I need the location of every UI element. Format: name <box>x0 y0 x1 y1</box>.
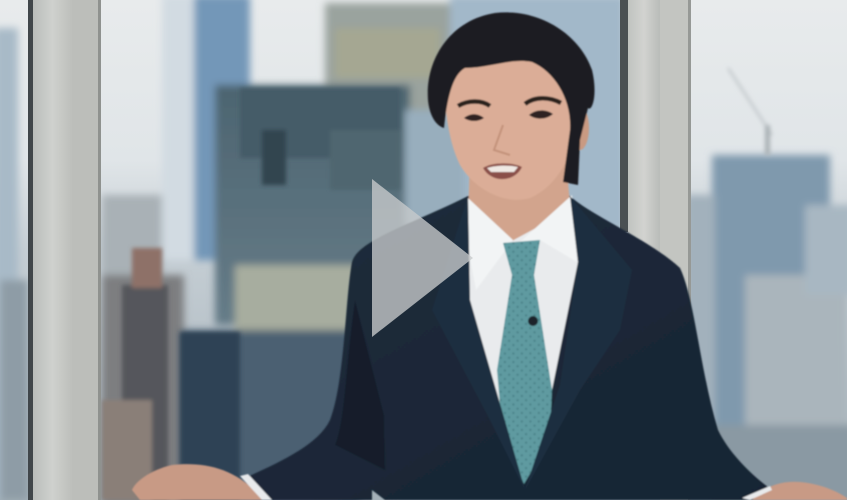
hand left <box>132 464 262 500</box>
shirt collar <box>465 195 577 290</box>
suit jacket <box>245 196 772 500</box>
lapels <box>432 196 632 490</box>
shirt <box>463 205 578 470</box>
tie <box>497 240 552 484</box>
inner arm shadow <box>335 300 385 470</box>
shirt cuff right <box>742 486 772 500</box>
hand right <box>752 482 847 500</box>
icon: play button <box>372 179 473 337</box>
window frames and columns <box>28 0 691 500</box>
eyes and brows <box>458 98 561 106</box>
ear <box>571 106 589 150</box>
head <box>445 36 577 200</box>
hair <box>428 12 595 185</box>
mouth <box>483 163 522 179</box>
shirt cuff left <box>240 474 272 500</box>
nose shadow <box>494 125 510 155</box>
microphone <box>528 316 538 326</box>
neck <box>468 150 572 265</box>
